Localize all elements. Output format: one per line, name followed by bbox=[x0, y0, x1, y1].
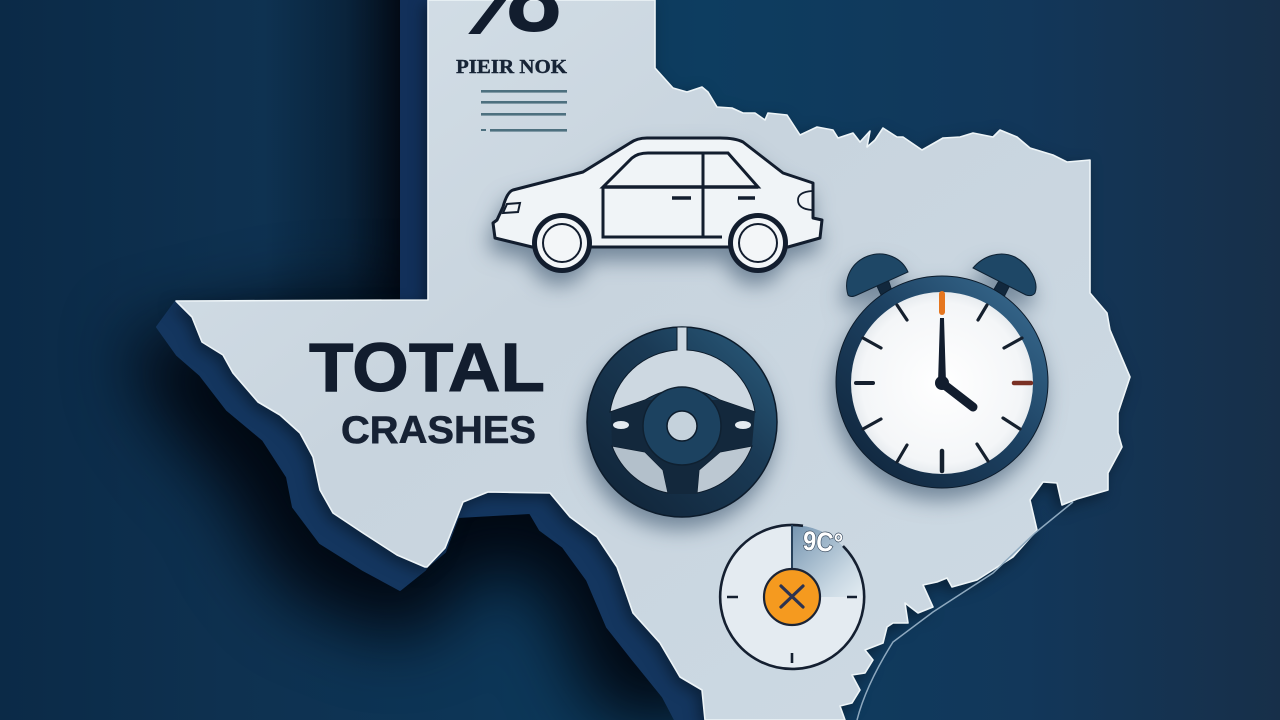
coastline highlight bbox=[857, 502, 1073, 720]
texas map surface bbox=[176, 0, 1130, 720]
icon: orange x badge bbox=[764, 569, 820, 625]
title: total: TOTAL bbox=[309, 329, 545, 406]
small heading: PIEIR NOK bbox=[456, 56, 567, 78]
subtitle: crashes: CRASHES bbox=[341, 409, 536, 452]
icon: car bbox=[493, 138, 822, 273]
texas map extrusion bbox=[157, 301, 720, 720]
panhandle side wall bbox=[400, 0, 432, 300]
icon: alarm clock bbox=[836, 254, 1048, 488]
gauge value: 9C° bbox=[802, 526, 844, 558]
gauge dial bbox=[720, 525, 864, 669]
icon: steering wheel bbox=[587, 327, 777, 517]
top percent figure bbox=[461, 0, 562, 53]
text lines placeholder bbox=[481, 90, 567, 132]
